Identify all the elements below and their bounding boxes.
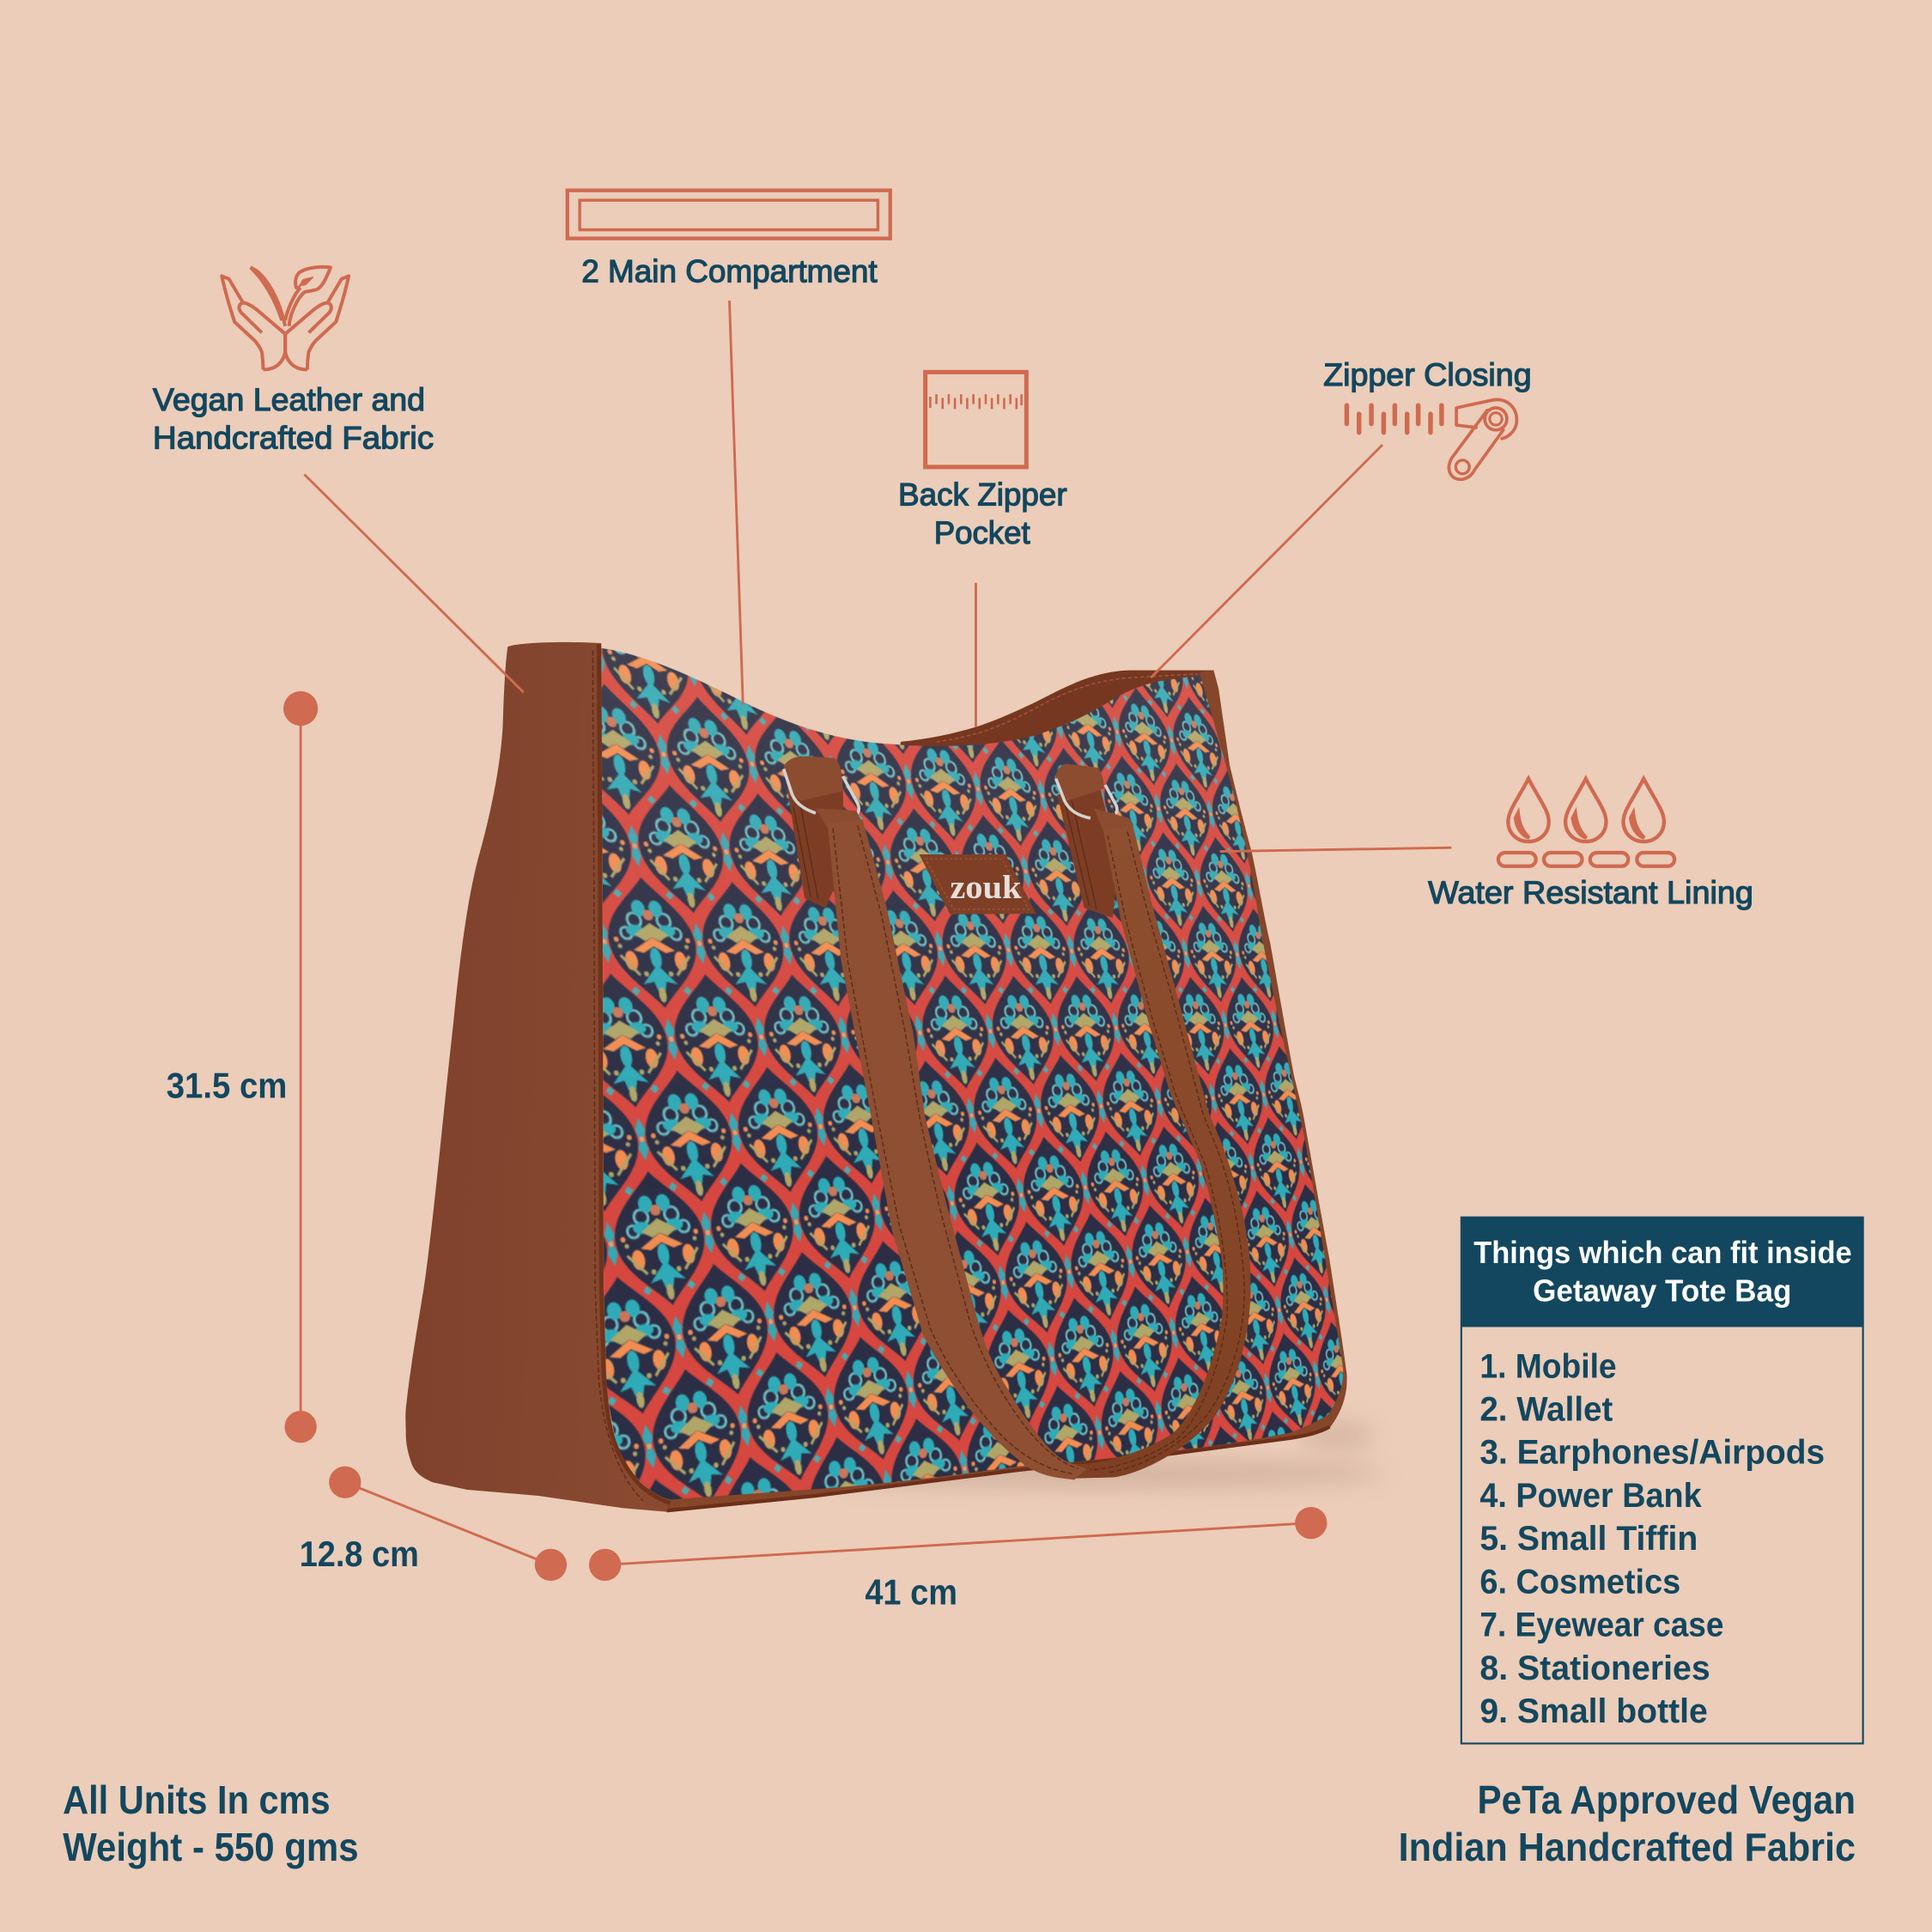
- leader line: back zipper pocket: [975, 583, 976, 727]
- list of items: 3. Earphones/Airpods: [1479, 1433, 1825, 1472]
- label: zipper closing: Zipper Closing: [1323, 357, 1532, 392]
- label: back zipper pocket: [898, 477, 1067, 550]
- right hand: [285, 276, 349, 369]
- panel header: [1461, 1218, 1863, 1327]
- label: back zipper pocket: Pocket: [934, 515, 1030, 550]
- panel header: Things which can fit inside: [1473, 1236, 1852, 1270]
- logo plate: zouk: [950, 869, 1022, 906]
- dimension: width: [589, 1507, 1327, 1581]
- side seam stitching: [592, 651, 643, 1501]
- label: back zipper pocket: Back Zipper: [898, 477, 1067, 512]
- footer: units and weight: Weight - 550 gms: [63, 1825, 359, 1869]
- list of items: 2. Wallet: [1479, 1389, 1613, 1428]
- bag front fabric panel: [601, 647, 1343, 1499]
- footer: units and weight: All Units In cms: [63, 1777, 331, 1822]
- list of items: 1. Mobile: [1479, 1346, 1617, 1385]
- label: height: 31.5 cm: [167, 1066, 287, 1106]
- left strap: [828, 819, 1087, 1479]
- footer: certifications: PeTa Approved Vegan: [1478, 1777, 1856, 1822]
- dimension: height: [283, 691, 318, 1443]
- leader line: zipper closing: [1151, 445, 1382, 677]
- left strap tab: [784, 756, 862, 908]
- label: depth: 12.8 cm: [300, 1534, 419, 1574]
- label: vegan leather: [153, 382, 434, 455]
- strap stitching: [833, 825, 1244, 1473]
- logo plate: [919, 854, 1036, 914]
- label: vegan leather: Vegan Leather and: [153, 382, 425, 417]
- list of items: 9. Small bottle: [1479, 1692, 1708, 1730]
- footer: certifications: [1399, 1777, 1856, 1869]
- right strap tab: [1055, 764, 1133, 918]
- panel: things which fit inside: [1461, 1218, 1863, 1743]
- label: water resistant lining: Water Resistant Lining: [1428, 875, 1753, 910]
- panel header: Getaway Tote Bag: [1533, 1273, 1791, 1308]
- list of items: 8. Stationeries: [1479, 1649, 1710, 1687]
- list of items: 4. Power Bank: [1479, 1476, 1702, 1515]
- left hand: [222, 276, 285, 369]
- footer: certifications: Indian Handcrafted Fabric: [1399, 1825, 1856, 1869]
- icon: water drops with pills: [1498, 779, 1674, 866]
- icon: main compartment: [568, 191, 890, 239]
- label: 2 main compartment: 2 Main Compartment: [581, 254, 878, 289]
- label: vegan leather: Handcrafted Fabric: [153, 420, 434, 455]
- label: width: 41 cm: [865, 1571, 957, 1612]
- icon: zipper pull: [1346, 399, 1516, 479]
- right strap: [1065, 823, 1250, 1479]
- list of items: 7. Eyewear case: [1479, 1606, 1723, 1644]
- bag leather parts: [405, 642, 1250, 1512]
- leader line: main compartment: [729, 301, 743, 705]
- leader line: vegan leather: [304, 474, 524, 692]
- list of items: 5. Small Tiffin: [1479, 1519, 1698, 1558]
- left leaf: [251, 267, 285, 326]
- bag side panel: [405, 642, 671, 1512]
- list of items: 6. Cosmetics: [1479, 1562, 1680, 1601]
- footer: units and weight: [63, 1777, 359, 1869]
- leader line: water resistant lining: [1220, 848, 1451, 852]
- list of items: [1479, 1346, 1825, 1730]
- right leaf: [285, 267, 331, 326]
- dimension: depth: [329, 1467, 567, 1581]
- icon: hands holding leaves: [222, 267, 349, 369]
- icon: back zipper pocket: [926, 372, 1026, 467]
- side seam: [598, 644, 671, 1504]
